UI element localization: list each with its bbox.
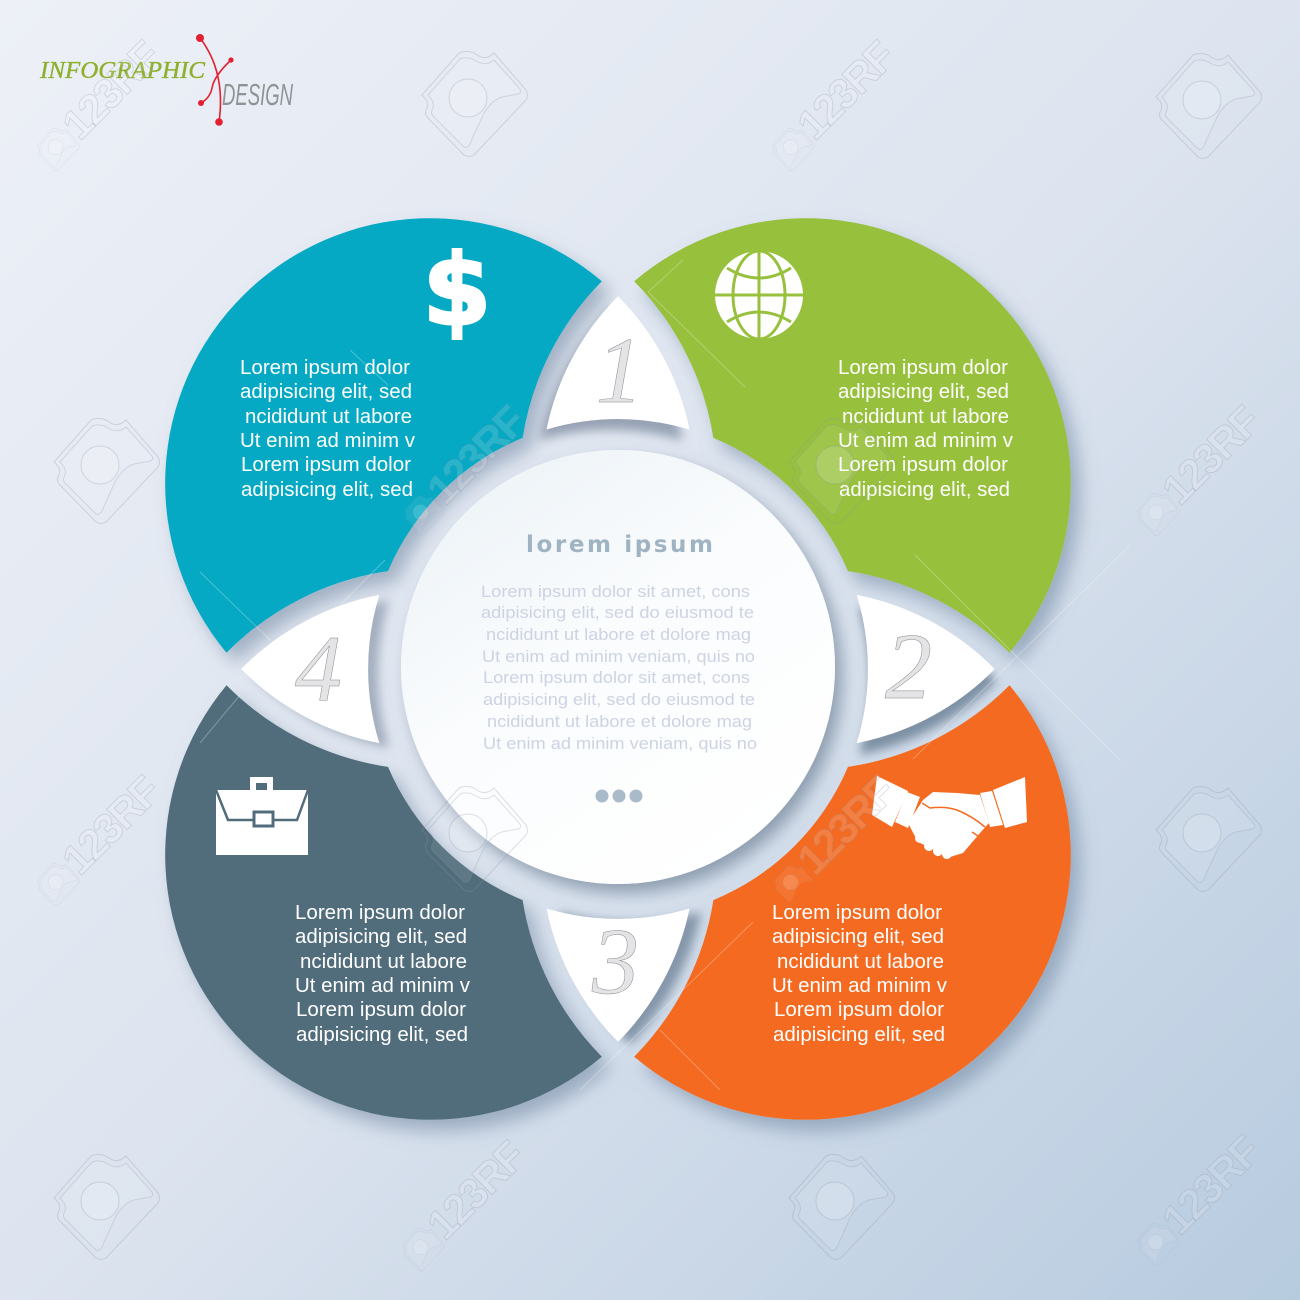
step 3 petal [546, 908, 690, 1042]
orange text block: Lorem ipsum dolor [772, 902, 942, 924]
green text block: adipisicing elit, sed [839, 479, 1010, 501]
step 3 petal: 3 [591, 910, 639, 1014]
green text block: Lorem ipsum dolor [838, 454, 1008, 476]
slate text block: Lorem ipsum dolor [296, 999, 466, 1021]
logo: DESIGN [222, 77, 293, 112]
panel: teal finance [165, 218, 602, 653]
watermark: stock logos: 123RF [1153, 397, 1270, 513]
watermark: stock logos: 123RF [788, 767, 905, 883]
green text block: Ut enim ad minim v [838, 430, 1013, 452]
center text block: Lorem ipsum dolor sit amet, cons [481, 582, 750, 601]
orange text block: adipisicing elit, sed [772, 926, 944, 948]
teal text block: adipisicing elit, sed [241, 479, 413, 501]
teal text block: Ut enim ad minim v [240, 430, 415, 452]
orange text block: Ut enim ad minim v [772, 975, 947, 997]
slate text block: Lorem ipsum dolor [295, 902, 465, 924]
orange text block: adipisicing elit, sed [773, 1024, 945, 1046]
step 1 petal: 1 [596, 319, 643, 423]
watermark: stock logos: 123RF [788, 32, 905, 148]
slate text block: Ut enim ad minim v [295, 975, 470, 997]
watermark: stock logos: 123RF [418, 1132, 535, 1248]
watermark: stock logos: 123RF [53, 32, 170, 148]
panel: green global [634, 218, 1071, 653]
green text block [838, 357, 1013, 501]
watermark: stock logos: 123RF [418, 397, 535, 513]
center text block: ncididunt ut labore et dolore mag [487, 712, 752, 731]
teal text block: adipisicing elit, sed [240, 381, 412, 403]
center text block: Ut enim ad minim veniam, quis no [482, 647, 755, 666]
center text block: Lorem ipsum dolor sit amet, cons [483, 668, 750, 687]
watermark: stock logos: 123RF [1153, 1127, 1270, 1243]
center text block: ncididunt ut labore et dolore mag [486, 625, 751, 644]
orange text block: ncididunt ut labore [777, 951, 944, 973]
center heading: lorem ipsum [526, 532, 713, 558]
step 1 petal [546, 296, 690, 430]
green text block: Lorem ipsum dolor [838, 357, 1008, 379]
teal text block [240, 357, 415, 501]
panel: center circle [401, 450, 835, 884]
step 2 petal: 2 [885, 615, 932, 719]
step 4 petal: 4 [295, 617, 342, 721]
icon: globe [715, 251, 803, 339]
slate text block [295, 902, 470, 1046]
center text block: adipisicing elit, sed do eiusmod te [483, 690, 755, 709]
icon: briefcase [216, 777, 308, 855]
green text block: ncididunt ut labore [842, 406, 1009, 428]
teal text block: Lorem ipsum dolor [241, 454, 411, 476]
center text block: adipisicing elit, sed do eiusmod te [481, 603, 754, 622]
icon: dollar: $ [423, 234, 491, 348]
watermark: stock logos: 123RF [53, 767, 170, 883]
slate text block: adipisicing elit, sed [296, 1024, 468, 1046]
logo [39, 34, 293, 126]
orange text block: Lorem ipsum dolor [774, 999, 944, 1021]
logo: INFOGRAPHIC [39, 58, 206, 84]
icon: handshake [872, 776, 1027, 857]
teal text block: ncididunt ut labore [245, 406, 412, 428]
slate text block: ncididunt ut labore [300, 951, 467, 973]
step 2 petal [857, 595, 995, 743]
panel: slate business [165, 685, 602, 1120]
panel: orange partnership [634, 685, 1071, 1120]
green text block: adipisicing elit, sed [838, 381, 1009, 403]
slate text block: adipisicing elit, sed [295, 926, 467, 948]
center text block: Ut enim ad minim veniam, quis no [483, 734, 757, 753]
orange text block [772, 902, 947, 1046]
teal text block: Lorem ipsum dolor [240, 357, 410, 379]
three dots [596, 790, 642, 802]
step 4 petal [241, 595, 379, 743]
center text block [481, 582, 757, 753]
